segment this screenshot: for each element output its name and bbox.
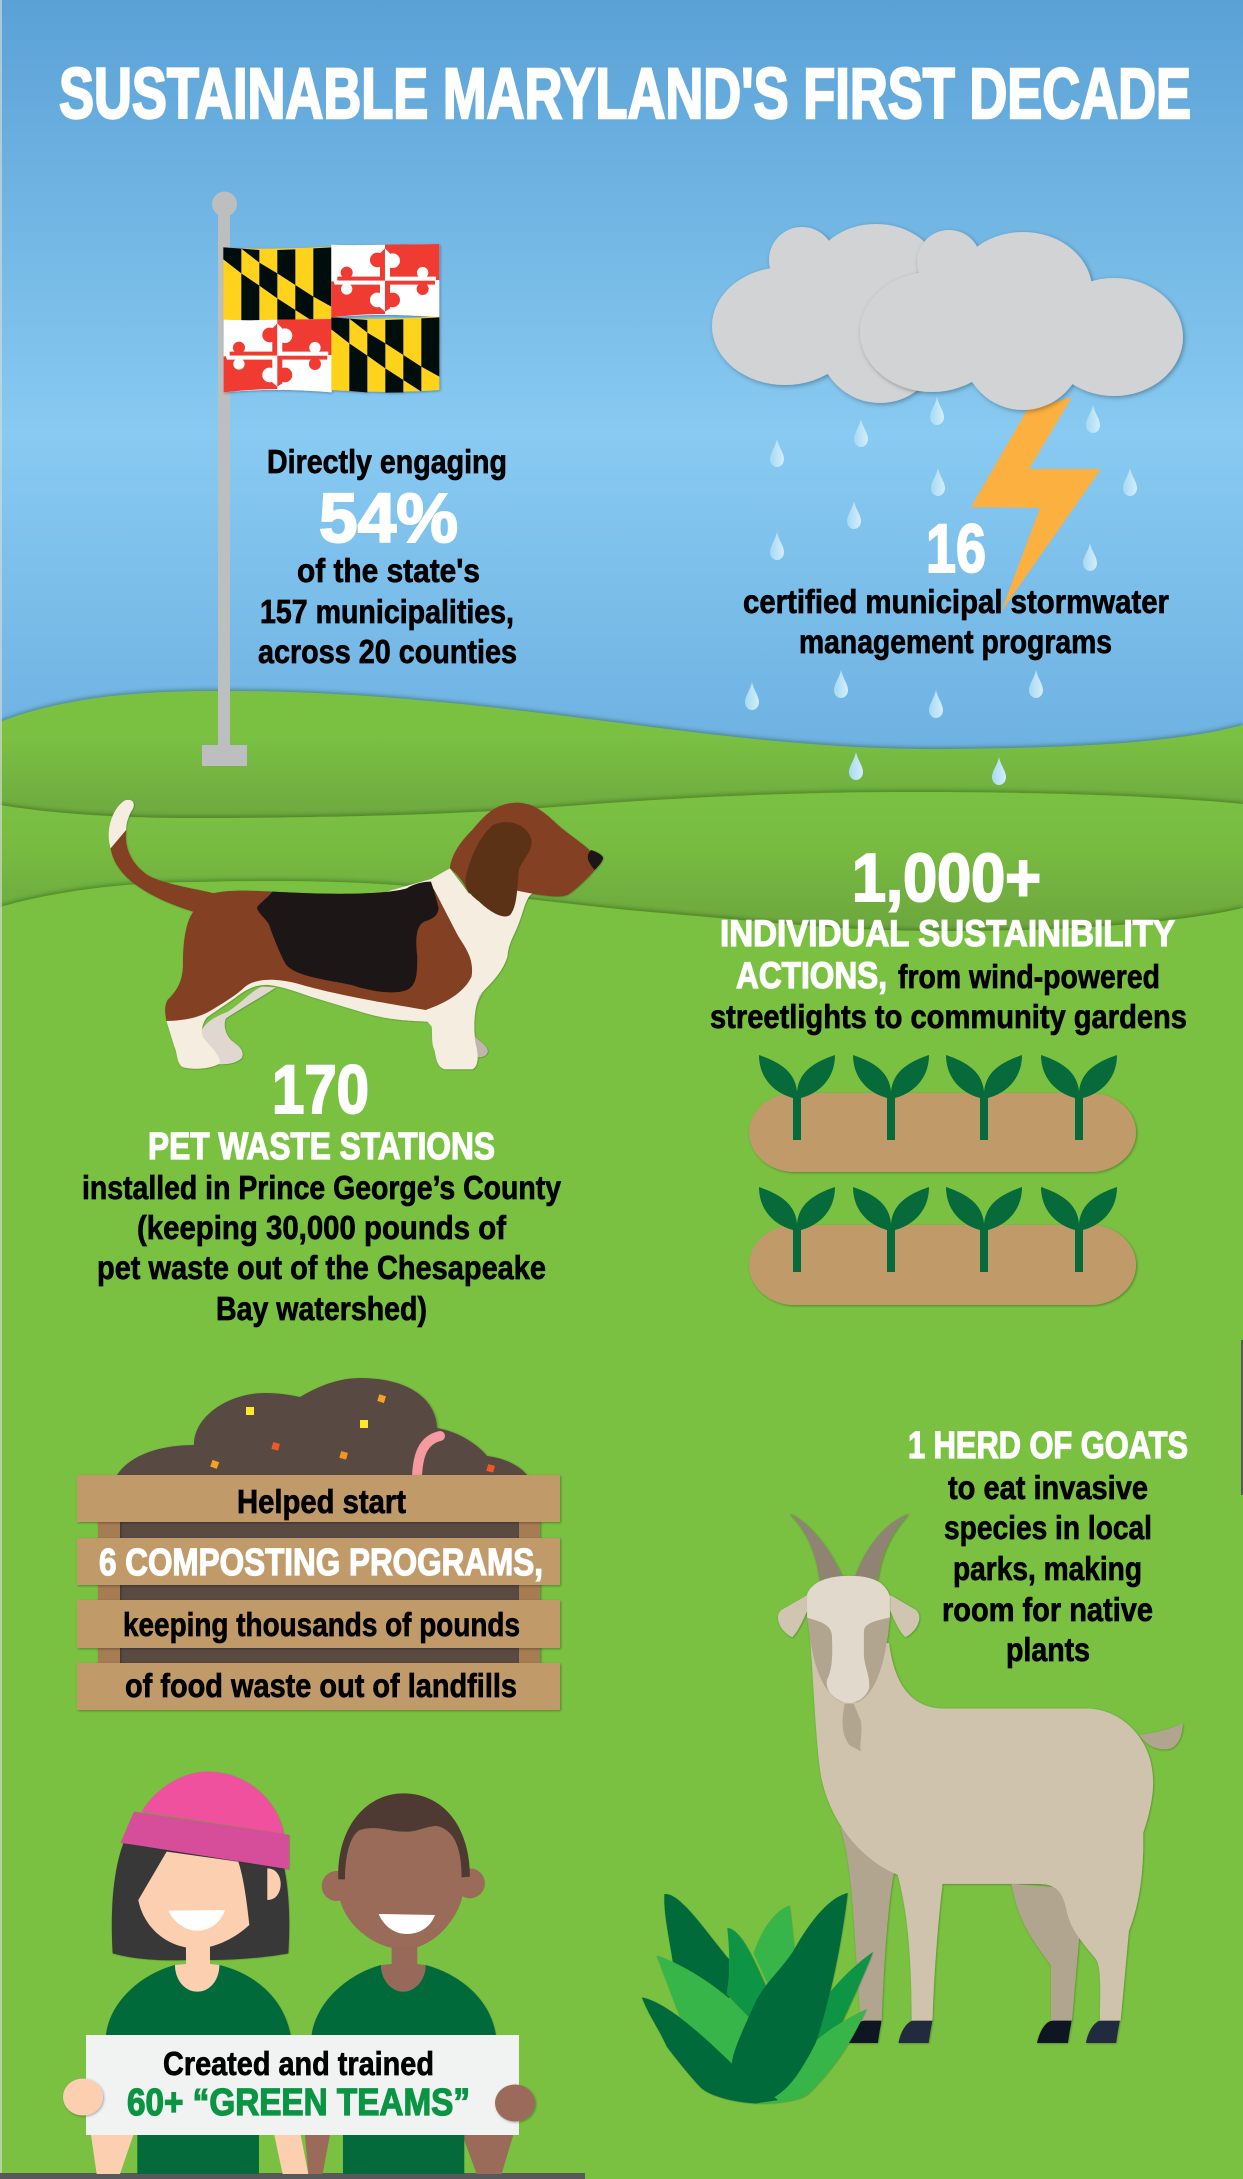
sign stat: 60+ “GREEN TEAMS” — [127, 2082, 470, 2124]
woman — [91, 1772, 308, 2174]
face shade — [807, 1617, 890, 1702]
description: streetlights to community gardens — [710, 998, 1187, 1035]
compost mound — [117, 1378, 527, 1490]
icon: compost bin — [77, 1378, 560, 1710]
description: Bay watershed) — [216, 1290, 427, 1327]
brown body — [165, 884, 472, 1021]
leaves front — [642, 1997, 778, 2103]
stat: 16: 16 — [926, 510, 986, 587]
text: 16 stormwater programs — [743, 510, 1169, 660]
hill: middle — [0, 792, 1243, 2179]
beard — [843, 1704, 861, 1751]
stat: 54%: 54% — [319, 479, 458, 557]
description: across 20 counties — [258, 633, 517, 670]
description: from wind-powered — [898, 958, 1160, 995]
text: 170 pet waste stations — [82, 1051, 562, 1327]
icon: clouds — [712, 224, 1183, 410]
description: to eat invasive — [948, 1469, 1148, 1506]
icon: goat — [778, 1513, 1183, 2043]
label line: Directly engaging — [267, 443, 507, 480]
tail — [111, 830, 214, 912]
description: (keeping 30,000 pounds of — [137, 1209, 507, 1246]
subheading continued: ACTIONS, — [736, 955, 887, 996]
horns — [789, 1513, 909, 1580]
far hooves — [848, 2021, 1072, 2043]
bin inside — [120, 1515, 519, 1665]
right cloud — [860, 230, 1183, 410]
man — [305, 1793, 513, 2174]
description — [710, 958, 1187, 1035]
bin posts — [98, 1515, 540, 1665]
text: compost programs — [99, 1483, 543, 1704]
cream chest, belly and legs — [166, 868, 533, 1069]
black saddle — [257, 882, 439, 992]
icon: basset hound — [109, 800, 603, 1069]
text: compost programs: Helped start — [237, 1483, 406, 1520]
worm — [417, 1436, 440, 1476]
far legs — [840, 1827, 1080, 2023]
stat: 170: 170 — [272, 1051, 369, 1128]
description: parks, making — [953, 1550, 1142, 1587]
description: certified municipal stormwater — [743, 583, 1169, 620]
text: compost programs: keeping thousands of pounds — [123, 1606, 520, 1643]
sign with text — [63, 2035, 535, 2135]
subheading: PET WASTE STATIONS — [148, 1126, 495, 1168]
sign board — [86, 2035, 519, 2135]
head — [450, 803, 595, 896]
compost specks — [210, 1394, 495, 1473]
icon: garden bed top — [749, 1055, 1136, 1172]
tail tip — [109, 800, 134, 848]
text: 1,000+ sustainability actions — [710, 840, 1187, 1035]
head — [807, 1576, 890, 1703]
description: room for native — [942, 1591, 1153, 1628]
left edge strip — [0, 0, 2, 2179]
sky background — [0, 0, 1243, 780]
ears — [778, 1595, 919, 1637]
far hind leg — [200, 987, 276, 1064]
text: 54 percent of municipalities — [258, 443, 517, 670]
hill: back — [0, 691, 1243, 2179]
description: species in local — [944, 1509, 1152, 1546]
text: compost programs: of food waste out of landfills — [125, 1667, 517, 1704]
icon: lightning bolt — [971, 397, 1101, 612]
icon: garden bed bottom — [749, 1187, 1136, 1305]
description: pet waste out of the Chesapeake — [97, 1249, 546, 1286]
tail — [1139, 1723, 1183, 1749]
right edge strip — [1241, 1340, 1243, 1495]
left cloud — [712, 224, 942, 403]
description: of the state's — [297, 552, 480, 589]
bottom bar — [0, 2173, 585, 2179]
hands — [63, 2078, 535, 2122]
nose — [588, 850, 603, 870]
leaves back — [664, 1894, 729, 2002]
far front leg — [465, 993, 488, 1057]
text: herd of goats — [908, 1425, 1188, 1668]
near hooves — [899, 2021, 1120, 2043]
icon: plant — [642, 1893, 873, 2104]
hill: front — [0, 881, 1243, 2179]
description: plants — [1006, 1631, 1090, 1668]
icon: Maryland flag — [223, 244, 439, 393]
description — [942, 1469, 1153, 1668]
description — [743, 583, 1169, 660]
description — [82, 1169, 562, 1327]
ear — [465, 822, 532, 916]
description: management programs — [799, 623, 1112, 660]
description — [258, 552, 517, 670]
stat: 1,000+: 1,000+ — [852, 840, 1041, 916]
bin planks — [77, 1475, 560, 1710]
icon: green team members holding sign — [91, 1772, 513, 2174]
text: compost programs: 6 COMPOSTING PROGRAMS, — [99, 1542, 543, 1584]
description: 157 municipalities, — [260, 593, 514, 630]
description: installed in Prince George’s County — [82, 1169, 562, 1206]
body — [810, 1639, 1153, 2021]
icon: rain drops — [745, 397, 1137, 785]
sign label: Created and trained — [163, 2045, 434, 2082]
subheading: INDIVIDUAL SUSTAINIBILITY — [720, 913, 1175, 954]
icon: flagpole — [202, 192, 247, 766]
